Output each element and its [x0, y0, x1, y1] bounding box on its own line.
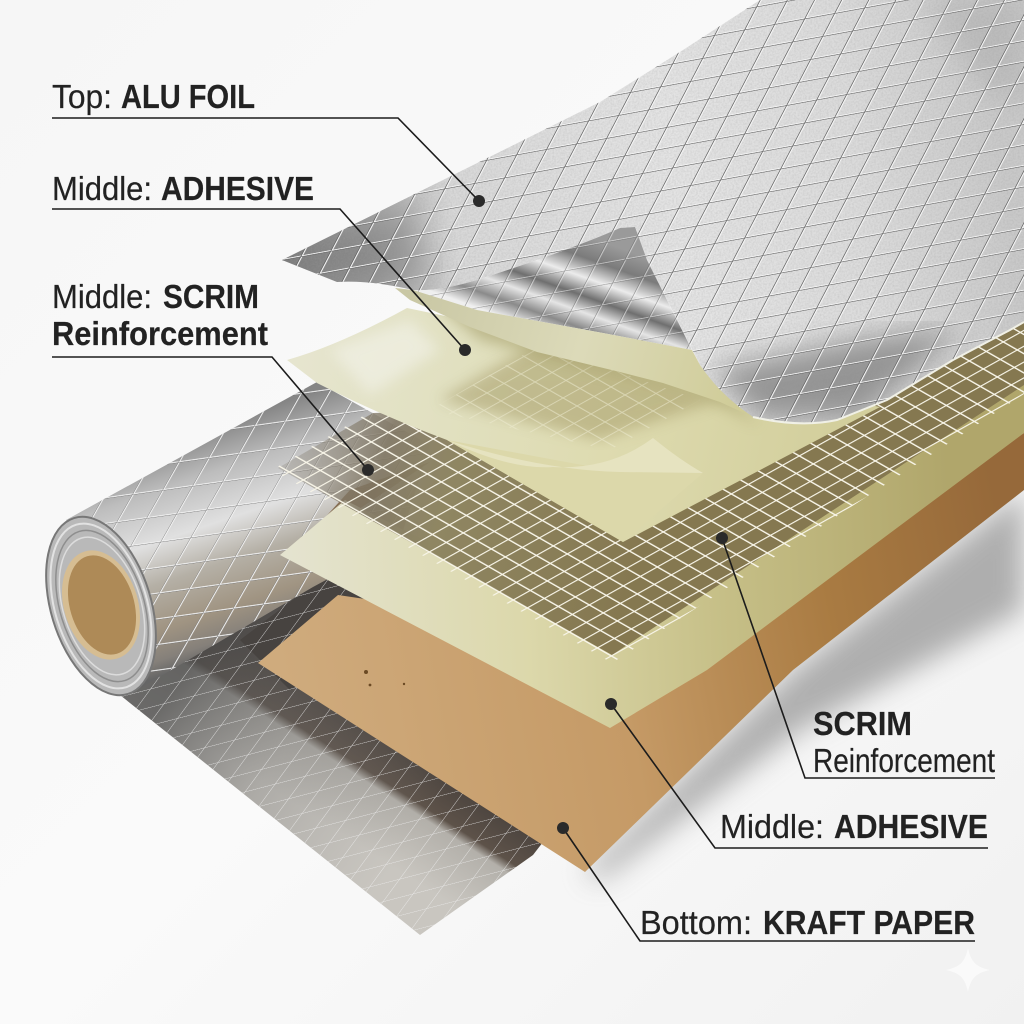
curled underside, cream adhesive — [395, 288, 753, 417]
label: middle scrim reinforcement: SCRIM — [163, 278, 259, 315]
lower foil sheet — [120, 560, 560, 935]
adhesive fold — [447, 440, 703, 542]
lower cream adhesive layer — [280, 375, 1024, 728]
label: scrim reinforcement right: SCRIM — [813, 705, 912, 742]
label: middle adhesive: ADHESIVE — [161, 170, 314, 207]
cardboard core — [49, 541, 153, 669]
label: top alu foil: ALU FOIL — [121, 78, 255, 115]
foil face — [282, 0, 1024, 423]
label: top alu foil — [52, 78, 485, 207]
label: scrim reinforcement right: Reinforcement — [813, 742, 995, 779]
label: middle adhesive — [52, 170, 471, 356]
label: bottom kraft paper: Bottom: — [640, 904, 752, 941]
label: middle scrim reinforcement: Reinforcement — [52, 315, 268, 352]
label: bottom kraft paper: KRAFT PAPER — [763, 904, 975, 941]
label: middle adhesive right — [605, 698, 988, 848]
roll end — [26, 503, 176, 709]
label: middle adhesive right: ADHESIVE — [834, 808, 988, 845]
shadow under kraft layer — [585, 490, 1024, 880]
label: middle adhesive right: Middle: — [720, 808, 824, 845]
label: top alu foil: Top: — [52, 78, 112, 115]
label: bottom kraft paper — [557, 822, 975, 941]
curled underside, silver — [413, 227, 692, 350]
foil edge highlight — [753, 322, 1024, 423]
roll body — [66, 382, 430, 690]
kraft paper layer — [258, 433, 1024, 872]
top aluminium foil sheet — [282, 0, 1024, 424]
label: middle scrim reinforcement: Middle: — [52, 278, 152, 315]
foil grain — [424, 0, 1024, 408]
ghost scrim showing through — [336, 315, 750, 448]
label: middle adhesive: Middle: — [52, 170, 152, 207]
foil roll — [26, 382, 430, 709]
brown reflection under scrim — [300, 462, 430, 545]
icon: sparkle watermark — [946, 948, 990, 992]
label: scrim reinforcement right — [716, 532, 995, 779]
upper adhesive sheet — [287, 290, 880, 542]
scrim reinforcement mesh — [272, 320, 1024, 663]
label: middle scrim reinforcement — [52, 278, 374, 476]
